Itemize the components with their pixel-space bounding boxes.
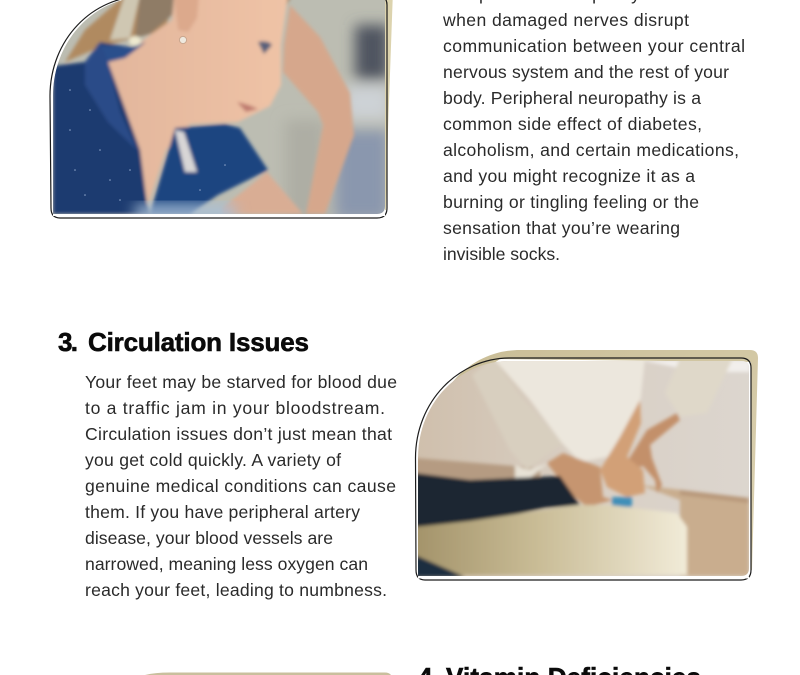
text block: circulation paragraph: genuine medical conditions can cause: [85, 476, 396, 496]
pearl earring: [179, 36, 187, 44]
dark photo frame: [416, 358, 751, 580]
text block: section 2 neuropathy paragraph: when damaged nerves disrupt: [442, 10, 689, 30]
panel: section 2 photo of woman with headache: [50, 0, 393, 220]
text block: section 2 neuropathy paragraph: nervous system and the rest of your: [443, 62, 729, 82]
text block: circulation paragraph: narrowed, meaning less oxygen can: [85, 554, 368, 574]
white and dark photo frame: [50, 0, 387, 218]
text block: circulation paragraph: disease, your blood vessels are: [85, 528, 333, 548]
text block: circulation paragraph: [85, 372, 397, 600]
heading: 3. Circulation Issues: Circulation Issues: [88, 327, 309, 357]
heading: 3. Circulation Issues: 3.: [58, 327, 78, 357]
text block: circulation paragraph: them. If you have peripheral artery: [85, 502, 360, 522]
text block: circulation paragraph: Your feet may be starved for blood due: [85, 372, 397, 392]
gold backing shape: [385, 0, 393, 210]
panel: section 4 photo top edge: [145, 672, 391, 675]
text block: section 2 neuropathy paragraph: alcoholism, and certain medications,: [443, 140, 739, 160]
text block: circulation paragraph: Circulation issues don’t just mean that: [85, 424, 392, 444]
photo: hands holding a foot: [415, 355, 755, 580]
text block: circulation paragraph: reach your feet, leading to numbness.: [85, 580, 387, 600]
text block: section 2 neuropathy paragraph: burning or tingling feeling or the: [443, 192, 699, 212]
text block: section 2 neuropathy paragraph: common side effect of diabetes,: [443, 114, 702, 134]
text block: section 2 neuropathy paragraph: invisible socks.: [443, 244, 560, 264]
text block: section 2 neuropathy paragraph: [442, 0, 745, 264]
text block: section 2 neuropathy paragraph: body. Peripheral neuropathy is a: [443, 88, 701, 108]
text block: circulation paragraph: to a traffic jam in your bloodstream.: [85, 398, 385, 418]
gold backing shape: [440, 350, 758, 570]
photo: woman holding her forehead: [50, 0, 390, 220]
panel: section 3 photo of foot massage: [415, 350, 758, 580]
text block: circulation paragraph: you get cold quickly. A variety of: [85, 450, 341, 470]
text block: section 2 neuropathy paragraph: communication between your central: [443, 36, 745, 56]
text block: section 2 neuropathy paragraph: and you might recognize it as a: [443, 166, 695, 186]
text block: section 2 neuropathy paragraph: sensation that you’re wearing: [443, 218, 680, 238]
